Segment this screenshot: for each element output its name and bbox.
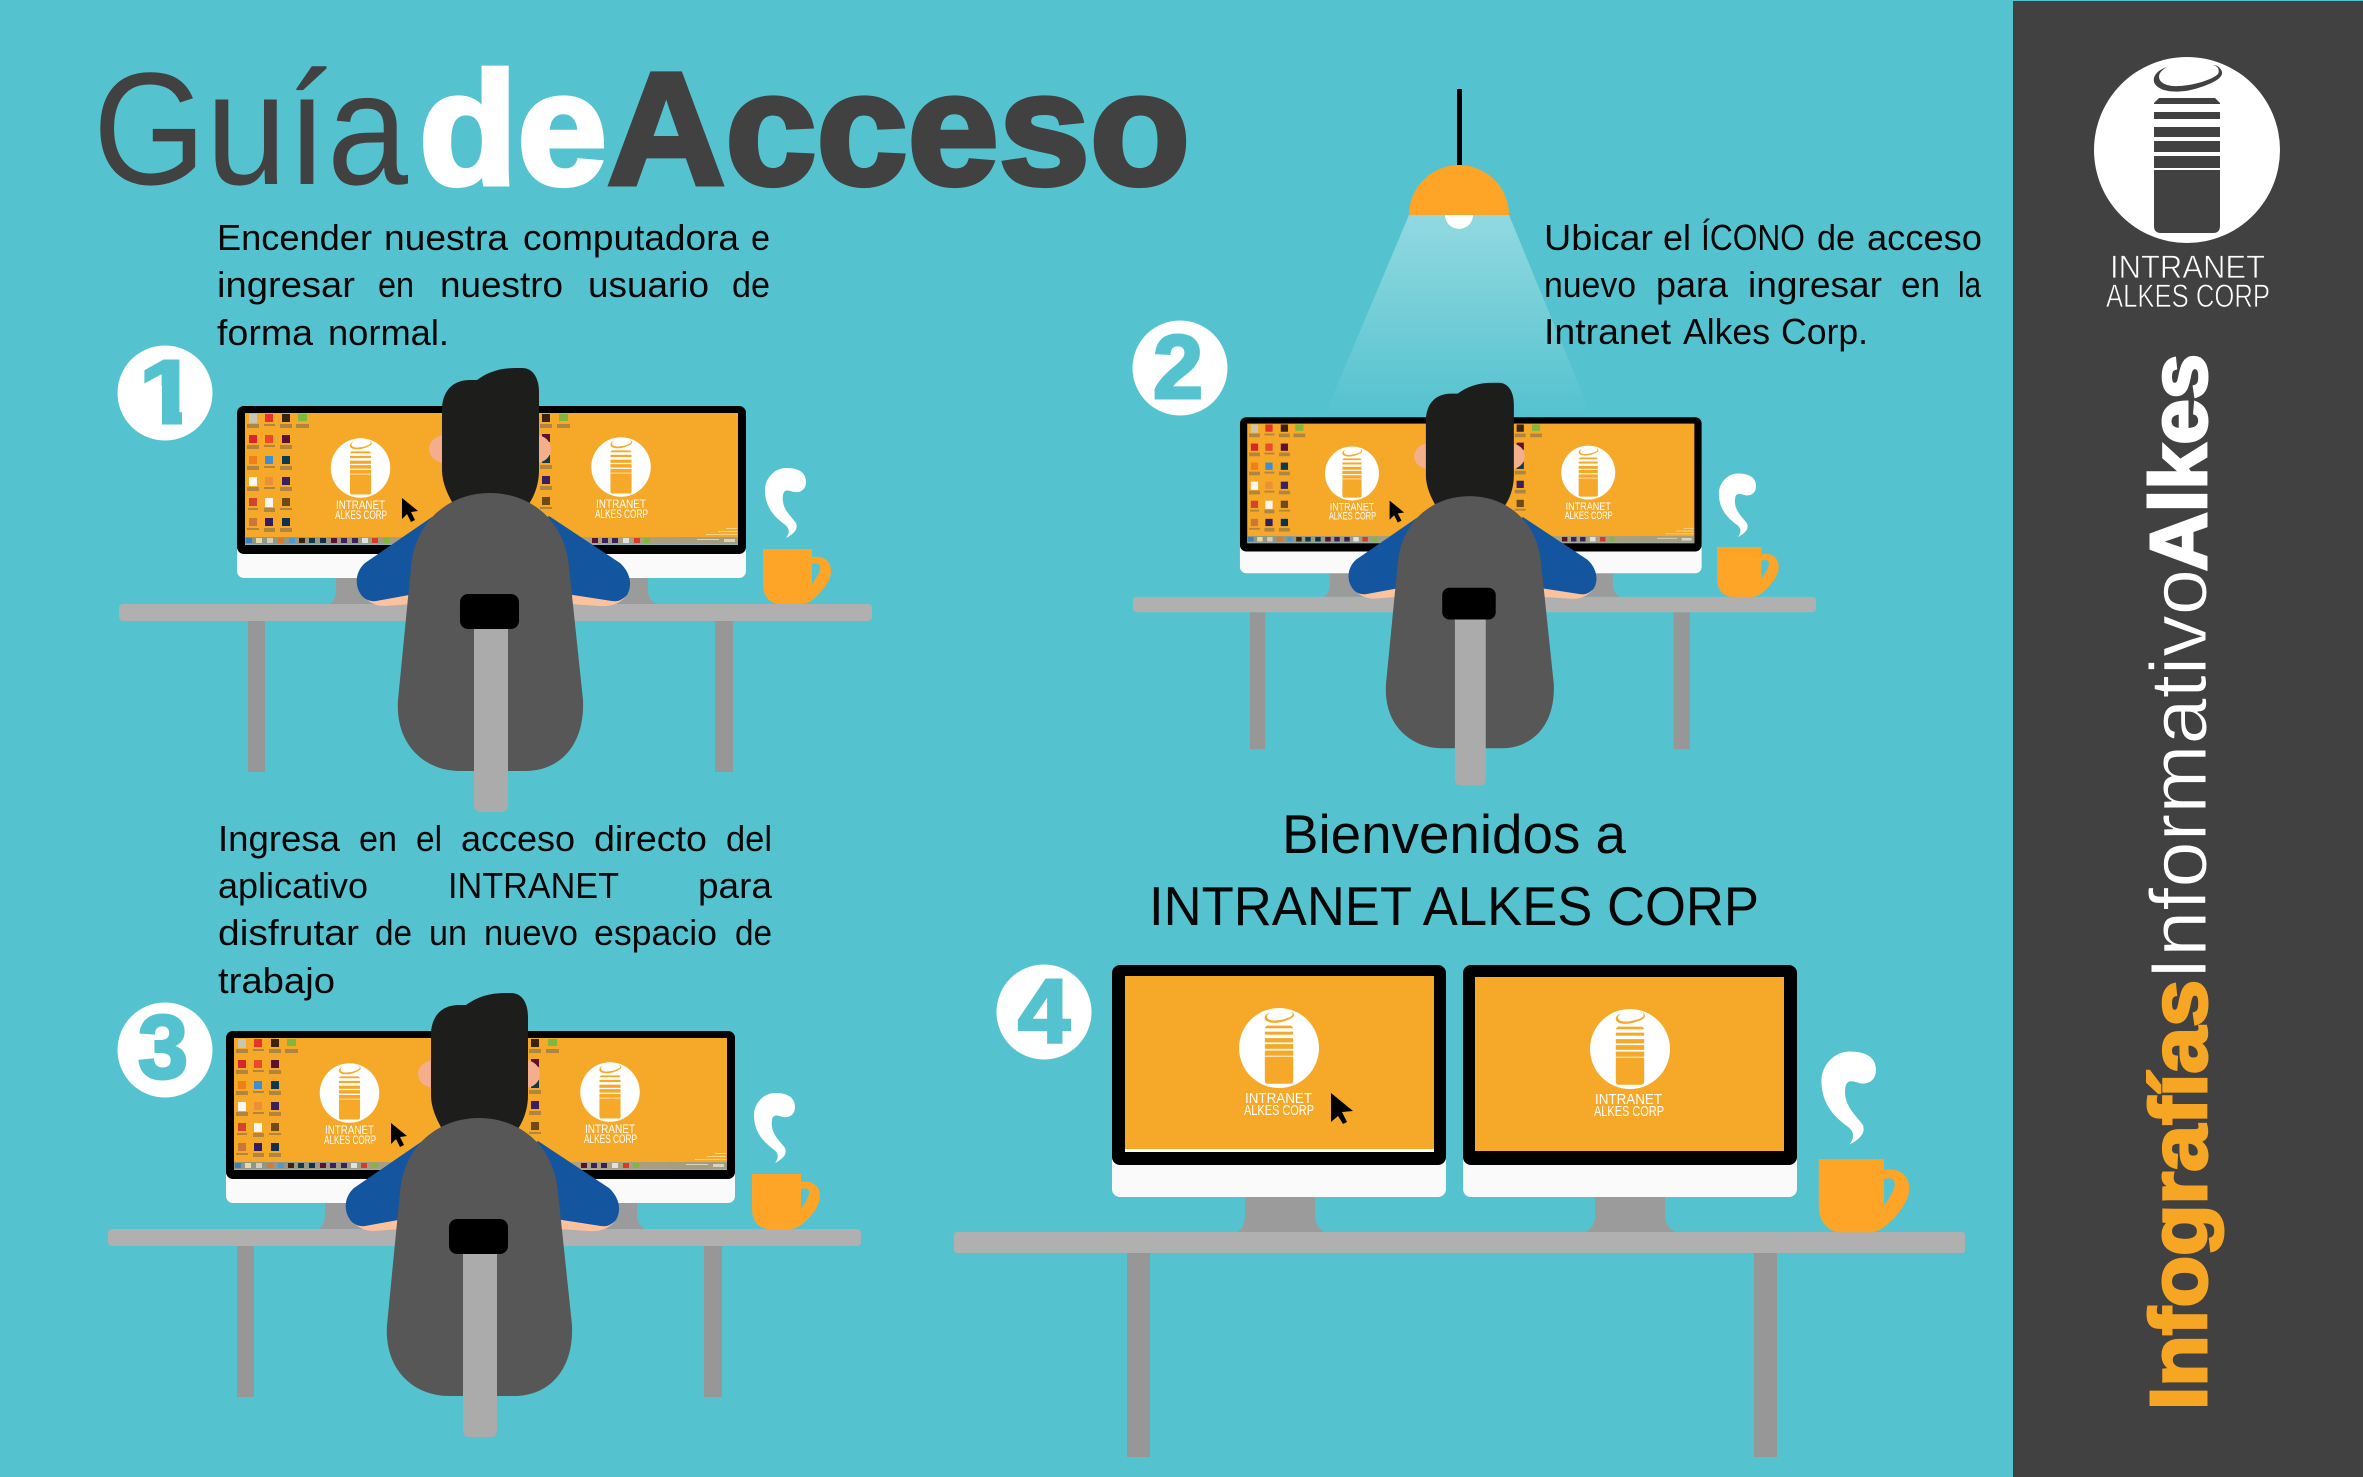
text: step 1: nuestro <box>440 264 563 305</box>
text: step 1: forma <box>217 312 314 353</box>
steam <box>1719 473 1756 537</box>
text: step 3: acceso <box>461 818 575 859</box>
number badge 3: 3 <box>138 998 188 1098</box>
sidebar <box>2013 1 2363 1477</box>
vertical heading: Informativo <box>2134 569 2223 980</box>
text: step 3: espacio <box>594 912 717 953</box>
monitor: ALKES CORP <box>595 507 648 521</box>
text: step 1: e <box>751 217 770 258</box>
title: Acceso <box>607 39 1190 218</box>
left monitor: ALKES CORP <box>1244 1102 1314 1119</box>
text: step 1: Encender <box>217 217 372 258</box>
vertical heading <box>2134 354 2223 1410</box>
text: step 1: ingresar <box>217 264 355 305</box>
monitor: ALKES CORP <box>1565 510 1613 522</box>
heading: welcome: INTRANET ALKES CORP <box>1149 875 1759 937</box>
number badge 4: 4 <box>1018 962 1070 1062</box>
text: step 3: para <box>698 865 773 906</box>
text: step 1: usuario <box>588 264 709 305</box>
coffee cup <box>1717 547 1779 597</box>
title: Guía <box>93 39 408 218</box>
scene 4: two monitors on desk <box>954 965 1965 1457</box>
monitor: INTRANET <box>596 497 647 511</box>
steam <box>1821 1051 1876 1145</box>
scene 3: person at desk <box>108 993 861 1437</box>
title <box>93 39 1190 218</box>
heading: welcome: Bienvenidos a <box>1282 803 1626 865</box>
title: de <box>419 39 607 218</box>
text: step 1 <box>217 217 770 353</box>
monitor: ALKES CORP <box>584 1132 637 1146</box>
text: step 3: INTRANET <box>448 865 619 906</box>
number badge 4 <box>996 962 1092 1062</box>
monitor: INTRANET <box>1330 502 1374 514</box>
person <box>357 368 630 812</box>
monitor: ALKES CORP <box>1329 511 1376 523</box>
text: step 1: normal. <box>328 312 449 353</box>
text: step 3: nuevo <box>484 912 578 953</box>
text: step 2: Intranet <box>1544 311 1671 352</box>
text: step 2: ÍCONO <box>1701 217 1805 258</box>
monitor <box>1240 417 1702 573</box>
desk <box>954 1197 1965 1457</box>
vertical heading: Infografías <box>2134 980 2223 1410</box>
person <box>346 993 619 1437</box>
heading: welcome <box>1149 803 1759 937</box>
text: step 1: nuestra <box>384 217 509 258</box>
left monitor <box>1112 965 1446 1197</box>
scene 1: person at desk <box>119 368 872 812</box>
sidebar logo <box>2094 57 2280 314</box>
text: step 2: la <box>1958 264 1982 305</box>
lamp <box>1326 89 1590 412</box>
text: step 1: de <box>732 264 770 305</box>
monitor: ALKES CORP <box>324 1133 376 1147</box>
text: step 3: trabajo <box>218 960 335 1001</box>
text: step 2: de <box>1817 217 1855 258</box>
text: step 3: de <box>375 912 412 953</box>
text: step 3: el <box>416 818 442 859</box>
number badge 2: 2 <box>1153 318 1203 418</box>
text: step 3: directo <box>594 818 707 859</box>
person <box>1349 383 1596 785</box>
text: step 2: el <box>1663 217 1691 258</box>
right monitor: ALKES CORP <box>1594 1103 1664 1120</box>
text: step 2: en <box>1901 264 1940 305</box>
text: step 2: Alkes <box>1683 311 1770 352</box>
monitor <box>226 1031 735 1203</box>
text: step 1: en <box>378 264 414 305</box>
left monitor: INTRANET <box>1245 1090 1312 1107</box>
text: step 2: acceso <box>1867 217 1982 258</box>
monitor: INTRANET <box>336 498 386 512</box>
text: step 3: en <box>359 818 397 859</box>
desk <box>1133 573 1816 749</box>
monitor: ALKES CORP <box>335 508 387 522</box>
steam <box>765 468 806 538</box>
text: step 3: un <box>429 912 467 953</box>
text: step 2: para <box>1656 264 1729 305</box>
steam <box>754 1093 795 1163</box>
text: step 3: disfrutar <box>218 912 359 953</box>
text: step 3: aplicativo <box>218 865 368 906</box>
coffee cup <box>1819 1159 1909 1232</box>
monitor: INTRANET <box>1566 501 1611 513</box>
monitor <box>237 406 746 578</box>
text: step 3: de <box>735 912 772 953</box>
number badge 2 <box>1132 318 1228 418</box>
desk <box>108 1203 861 1397</box>
sidebar logo: ALKES CORP <box>2106 278 2270 314</box>
right monitor: INTRANET <box>1595 1091 1662 1108</box>
number badge 1 <box>118 343 212 443</box>
desk <box>119 578 872 772</box>
text: step 3 <box>218 818 773 1001</box>
text: step 2: nuevo <box>1544 264 1636 305</box>
sidebar logo: INTRANET <box>2110 249 2265 285</box>
scene 2: person at desk <box>1133 383 1816 785</box>
text: step 2: Ubicar <box>1544 217 1653 258</box>
coffee cup <box>752 1174 820 1229</box>
text: step 2: ingresar <box>1748 264 1882 305</box>
number badge 1: 1 <box>139 343 197 443</box>
text: step 2: Corp. <box>1781 311 1868 352</box>
text: step 1: computadora <box>523 217 740 258</box>
text: step 2 <box>1544 217 1982 352</box>
number badge 3 <box>118 998 212 1098</box>
vertical heading: Alkes <box>2134 354 2223 571</box>
right monitor <box>1463 965 1797 1197</box>
text: step 3: del <box>726 818 772 859</box>
coffee cup <box>763 549 831 604</box>
monitor: INTRANET <box>585 1122 636 1136</box>
text: step 3: Ingresa <box>218 818 341 859</box>
monitor: INTRANET <box>325 1123 375 1137</box>
